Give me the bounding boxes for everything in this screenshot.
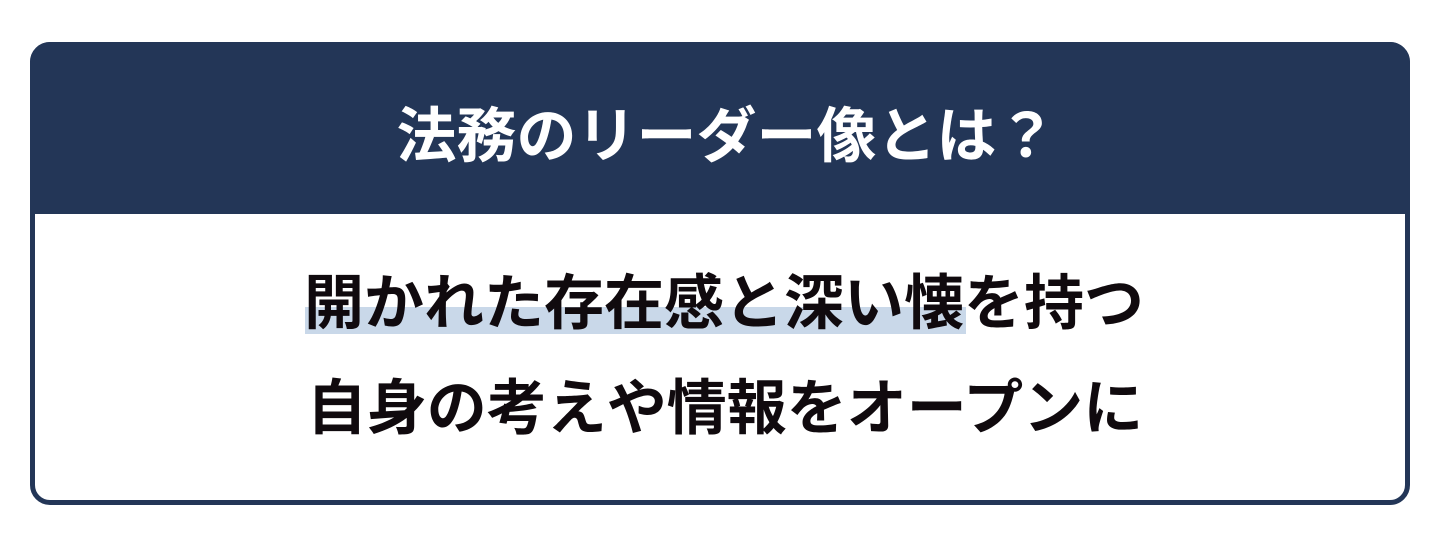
heading band	[30, 42, 1410, 214]
text line 2: 自身の考えや情報をオープンに	[307, 375, 1143, 442]
title: 法務のリーダー像とは？	[396, 103, 1056, 170]
highlight marker	[305, 307, 966, 334]
text line 1: 開かれた存在感と深い懐を持つ	[304, 270, 1144, 337]
